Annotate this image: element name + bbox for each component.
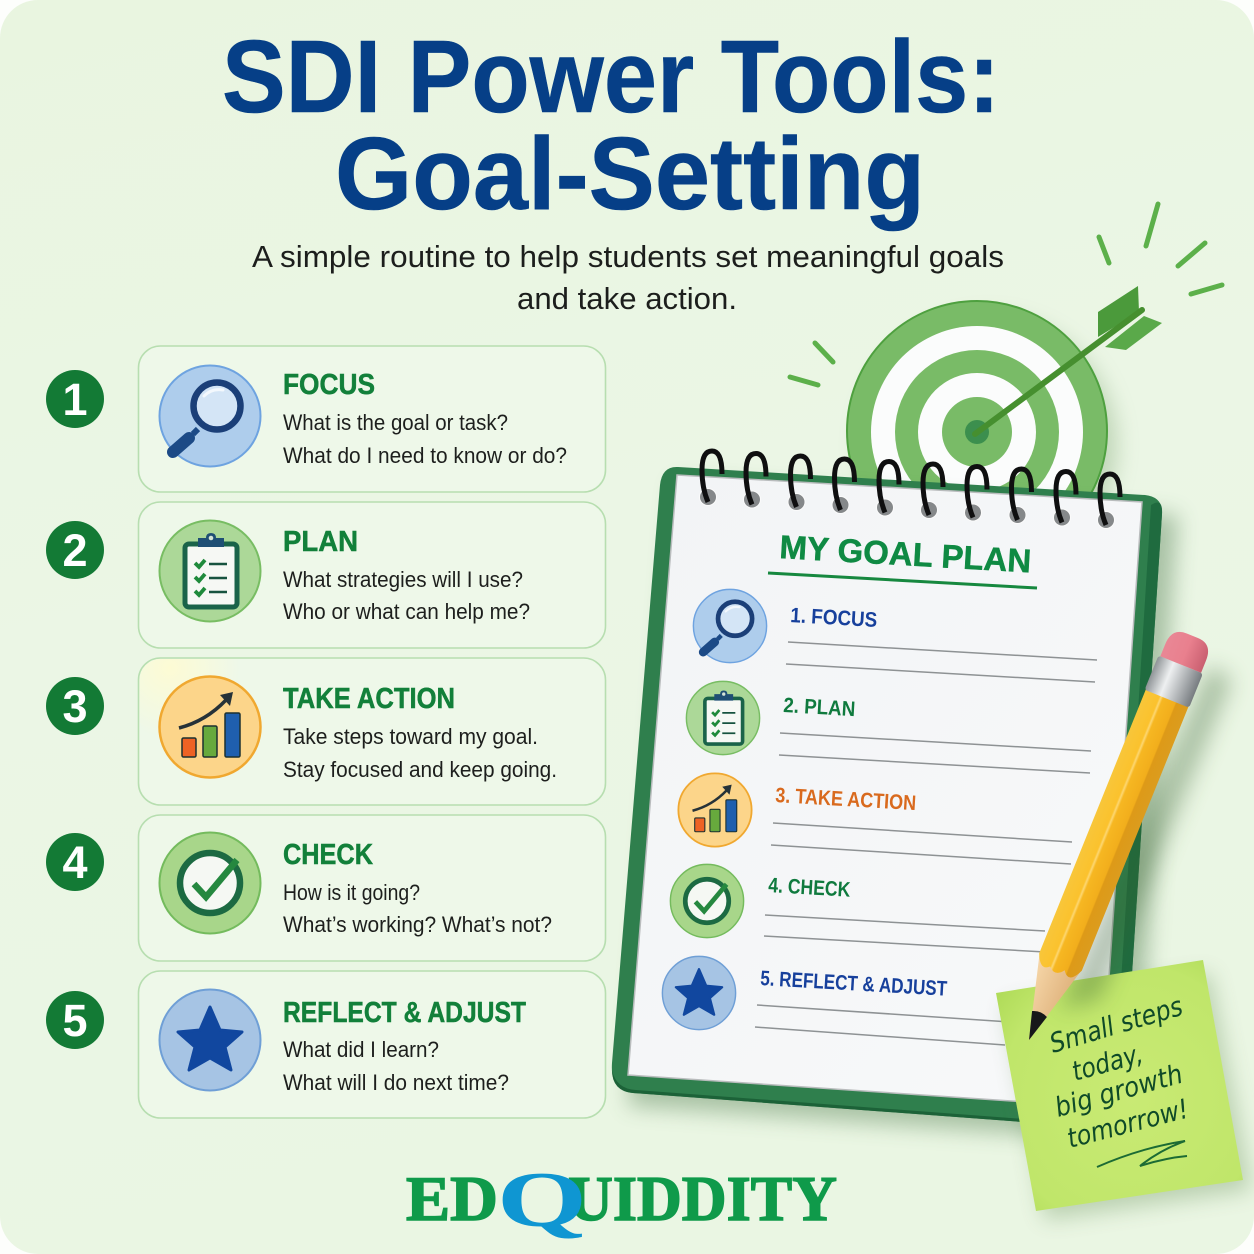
label: plan: 2. PLAN — [783, 694, 856, 721]
check heading: CHECK — [283, 839, 373, 871]
number badge 4: 4 — [62, 837, 88, 888]
title: SDI Power Tools: — [222, 19, 1000, 134]
icon: small clipboard — [686, 681, 760, 755]
icon: magnifying glass — [160, 366, 260, 466]
notebook row 3 — [678, 773, 1072, 864]
check text — [283, 880, 552, 937]
number badge 2: 2 — [62, 525, 88, 576]
step 4 row — [46, 815, 606, 961]
pencil shadow — [1060, 665, 1232, 1010]
sticky note — [996, 960, 1252, 1220]
notebook row 4 — [670, 864, 1045, 952]
notebook frame — [612, 467, 1162, 1128]
label: reflect and adjust: 5. REFLECT & ADJUST — [760, 967, 948, 1001]
number badge 1: 1 — [62, 374, 88, 425]
take action text — [283, 724, 557, 782]
subtitle — [252, 239, 1004, 316]
writing lines — [786, 642, 1097, 682]
number badge 5 — [46, 991, 104, 1049]
spiral rings — [699, 451, 1120, 529]
logo: Edquiddity: Q — [497, 1156, 587, 1243]
subtitle: A simple routine to help students set meaningful goals — [252, 239, 1004, 274]
plan heading: PLAN — [283, 526, 358, 558]
notebook heading: MY GOAL PLAN — [779, 528, 1032, 579]
notebook — [612, 451, 1178, 1142]
icon: check mark — [160, 832, 260, 934]
reflect and adjust text: What will I do next time? — [283, 1070, 509, 1095]
icon: small chart — [678, 773, 752, 847]
check text: What’s working? What’s not? — [283, 912, 552, 937]
logo: Edquiddity: UIDDITY — [568, 1163, 837, 1234]
icon: star — [160, 990, 260, 1090]
pencil ferrule — [1145, 656, 1203, 708]
notebook paper — [628, 475, 1142, 1107]
notebook frame bottom edge — [612, 1070, 1104, 1128]
plan text — [283, 567, 530, 624]
plan text: What strategies will I use? — [283, 567, 523, 592]
panel: plan — [138, 502, 606, 648]
icon: target with arrow — [847, 286, 1162, 573]
writing lines — [755, 1005, 1010, 1045]
plan text: Who or what can help me? — [283, 599, 530, 624]
sparkle lines — [790, 204, 1222, 385]
sticky shadow — [1005, 973, 1252, 1220]
icon: rising chart — [160, 676, 260, 778]
logo: Edquiddity — [406, 1156, 837, 1243]
squiggle underline — [1097, 1141, 1187, 1167]
check text: How is it going? — [283, 880, 420, 905]
title — [222, 19, 1000, 231]
notebook frame right edge — [1113, 502, 1162, 1112]
sticky paper — [996, 960, 1243, 1211]
number badge 3 — [46, 677, 104, 735]
pencil lead — [1022, 1009, 1048, 1043]
take action heading: TAKE ACTION — [283, 683, 455, 715]
icon: small star — [662, 956, 736, 1030]
sticky message: big growth — [1052, 1059, 1186, 1124]
focus text: What do I need to know or do? — [283, 443, 567, 468]
title: Goal-Setting — [335, 116, 925, 231]
number badge 2 — [46, 521, 104, 579]
reflect and adjust text: What did I learn? — [283, 1037, 439, 1062]
label: take action: 3. TAKE ACTION — [775, 784, 917, 815]
pencil wood — [1009, 956, 1080, 1048]
notebook row 1 — [693, 589, 1097, 682]
notebook shadow — [628, 482, 1178, 1142]
panel: focus — [138, 346, 606, 492]
take action text: Take steps toward my goal. — [283, 724, 538, 749]
writing lines — [779, 733, 1091, 773]
label: focus: 1. FOCUS — [790, 604, 878, 632]
panel: check — [138, 815, 606, 961]
icon: small check — [670, 864, 744, 938]
sticky message: tomorrow! — [1064, 1094, 1192, 1155]
number badge 4 — [46, 833, 104, 891]
notebook row 2 — [686, 681, 1091, 773]
step 3 row — [46, 658, 606, 805]
focus text: What is the goal or task? — [283, 410, 508, 435]
panel: take action — [138, 658, 606, 805]
number badge 1 — [46, 370, 104, 428]
panel: reflect and adjust — [138, 971, 606, 1118]
step 1 row — [46, 346, 606, 492]
reflect and adjust text — [283, 1037, 509, 1095]
number badge 5: 5 — [62, 995, 88, 1046]
notebook row 5 — [662, 956, 1010, 1045]
step 2 row — [46, 502, 606, 648]
notebook heading underline — [768, 573, 1037, 588]
take action text: Stay focused and keep going. — [283, 757, 557, 782]
writing lines — [771, 823, 1072, 864]
step 5 row — [46, 971, 606, 1118]
sticky message: today, — [1069, 1039, 1146, 1088]
sticky message — [1046, 991, 1192, 1155]
number badge 3: 3 — [62, 681, 88, 732]
subtitle: and take action. — [517, 281, 737, 316]
icon: clipboard — [160, 520, 260, 622]
writing lines — [764, 915, 1045, 952]
pencil body — [1035, 688, 1189, 981]
sticky message: Small steps — [1046, 991, 1186, 1060]
icon: small magnifier — [693, 589, 767, 663]
pencil — [1007, 627, 1232, 1049]
focus heading: FOCUS — [283, 369, 375, 401]
logo: Edquiddity: ED — [406, 1163, 498, 1234]
reflect and adjust heading: REFLECT & ADJUST — [283, 997, 526, 1029]
focus text — [283, 410, 567, 468]
label: check: 4. CHECK — [768, 874, 851, 902]
pencil eraser — [1160, 628, 1213, 673]
